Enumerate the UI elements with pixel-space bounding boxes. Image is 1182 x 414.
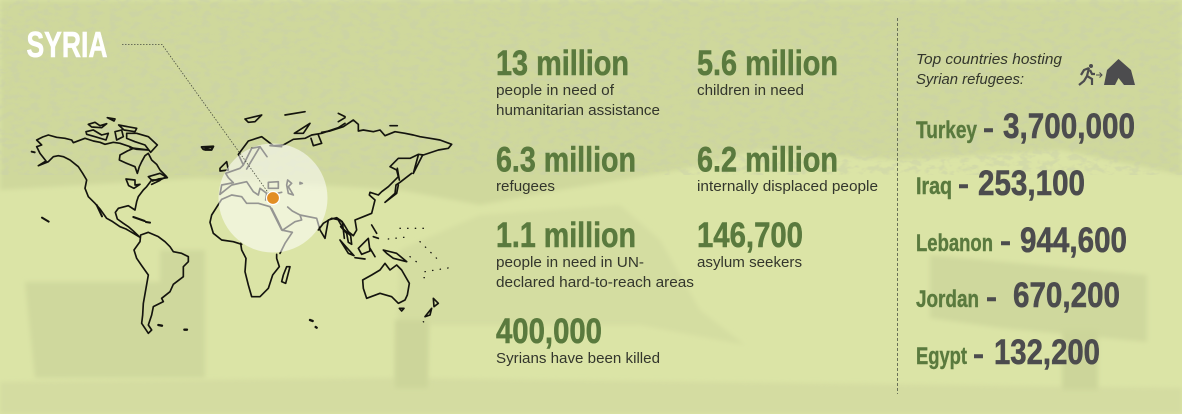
row: Egypt: 132,200 — [994, 333, 1100, 372]
stat: 6.2 million — [697, 140, 878, 195]
row: Iraq — [916, 164, 1085, 203]
Russia and East Asia — [318, 113, 452, 236]
row: Lebanon: - — [1000, 225, 1011, 258]
row: Egypt — [916, 333, 1100, 372]
row: Jordan: Jordan — [916, 286, 979, 313]
stat: 6.2 million: 6.2 million — [697, 140, 838, 180]
row: Egypt: Egypt — [916, 343, 967, 370]
stat: 1.1 million — [496, 216, 694, 291]
row: Lebanon — [916, 221, 1127, 260]
row: Turkey: Turkey — [916, 117, 978, 144]
stat: 13 million: humanitarian assistance — [496, 102, 660, 119]
stat: 146,700: 146,700 — [697, 216, 803, 255]
row: Iraq: - — [958, 168, 969, 201]
Syria location marker — [266, 192, 280, 204]
Africa south and Madagascar — [241, 243, 290, 297]
panel heading: Syrian refugees: — [916, 71, 1024, 88]
row: Lebanon: 944,600 — [1020, 221, 1127, 260]
stat: 5.6 million — [697, 44, 838, 99]
row: Turkey: - — [983, 112, 994, 145]
stat: 1.1 million: people in need in UN- — [496, 254, 644, 271]
stat: 6.2 million: internally displaced people — [697, 178, 878, 195]
stat: 6.3 million: 6.3 million — [496, 140, 636, 180]
row: Turkey: 3,700,000 — [1003, 107, 1135, 146]
stat: 5.6 million: children in need — [697, 82, 804, 99]
title: SYRIA — [26, 24, 108, 65]
Arctic islands — [86, 118, 157, 152]
stat: 13 million: 13 million — [496, 44, 629, 83]
stat: 5.6 million: 5.6 million — [697, 44, 838, 83]
stat: 400,000 — [496, 312, 660, 367]
row: Jordan: - — [986, 281, 997, 314]
row: Iraq: Iraq — [916, 173, 952, 200]
stat: 146,700 — [697, 216, 803, 271]
stat: 146,700: asylum seekers — [697, 254, 802, 271]
stat: 6.3 million: refugees — [496, 178, 555, 195]
highlight circle — [218, 144, 328, 252]
stat: 400,000: Syrians have been killed — [496, 350, 660, 367]
panel heading: Top countries hosting — [916, 51, 1063, 68]
row: Egypt: - — [973, 338, 984, 371]
stat: 1.1 million: declared hard-to-reach areas — [496, 274, 694, 291]
row: Jordan: 670,200 — [1013, 276, 1120, 315]
row: Iraq: 253,100 — [978, 164, 1085, 203]
leader line — [122, 44, 272, 198]
Baja, Cuba, Hawaii, Iceland, Aleutians — [32, 146, 213, 223]
row: Jordan — [916, 276, 1120, 315]
stat: 13 million — [496, 44, 660, 119]
row: Lebanon: Lebanon — [916, 230, 993, 257]
icon: refugee running to tent — [1079, 59, 1135, 85]
panel heading — [916, 51, 1063, 88]
statistics — [496, 44, 878, 367]
row: Turkey — [916, 107, 1135, 146]
stat: 1.1 million: 1.1 million — [496, 216, 636, 255]
Europe, Africa north, Middle East, India — [205, 112, 345, 253]
stat: 6.3 million — [496, 140, 636, 195]
South America — [134, 232, 317, 333]
Great Lakes and Gulf of St Lawrence — [126, 173, 167, 188]
North America — [32, 118, 213, 237]
stat: 13 million: people in need of — [496, 82, 615, 99]
stat: 400,000: 400,000 — [496, 312, 602, 351]
divider — [896, 18, 898, 394]
host countries panel — [916, 51, 1135, 372]
Southeast Asia and Oceania — [337, 218, 450, 322]
world map — [32, 112, 452, 333]
